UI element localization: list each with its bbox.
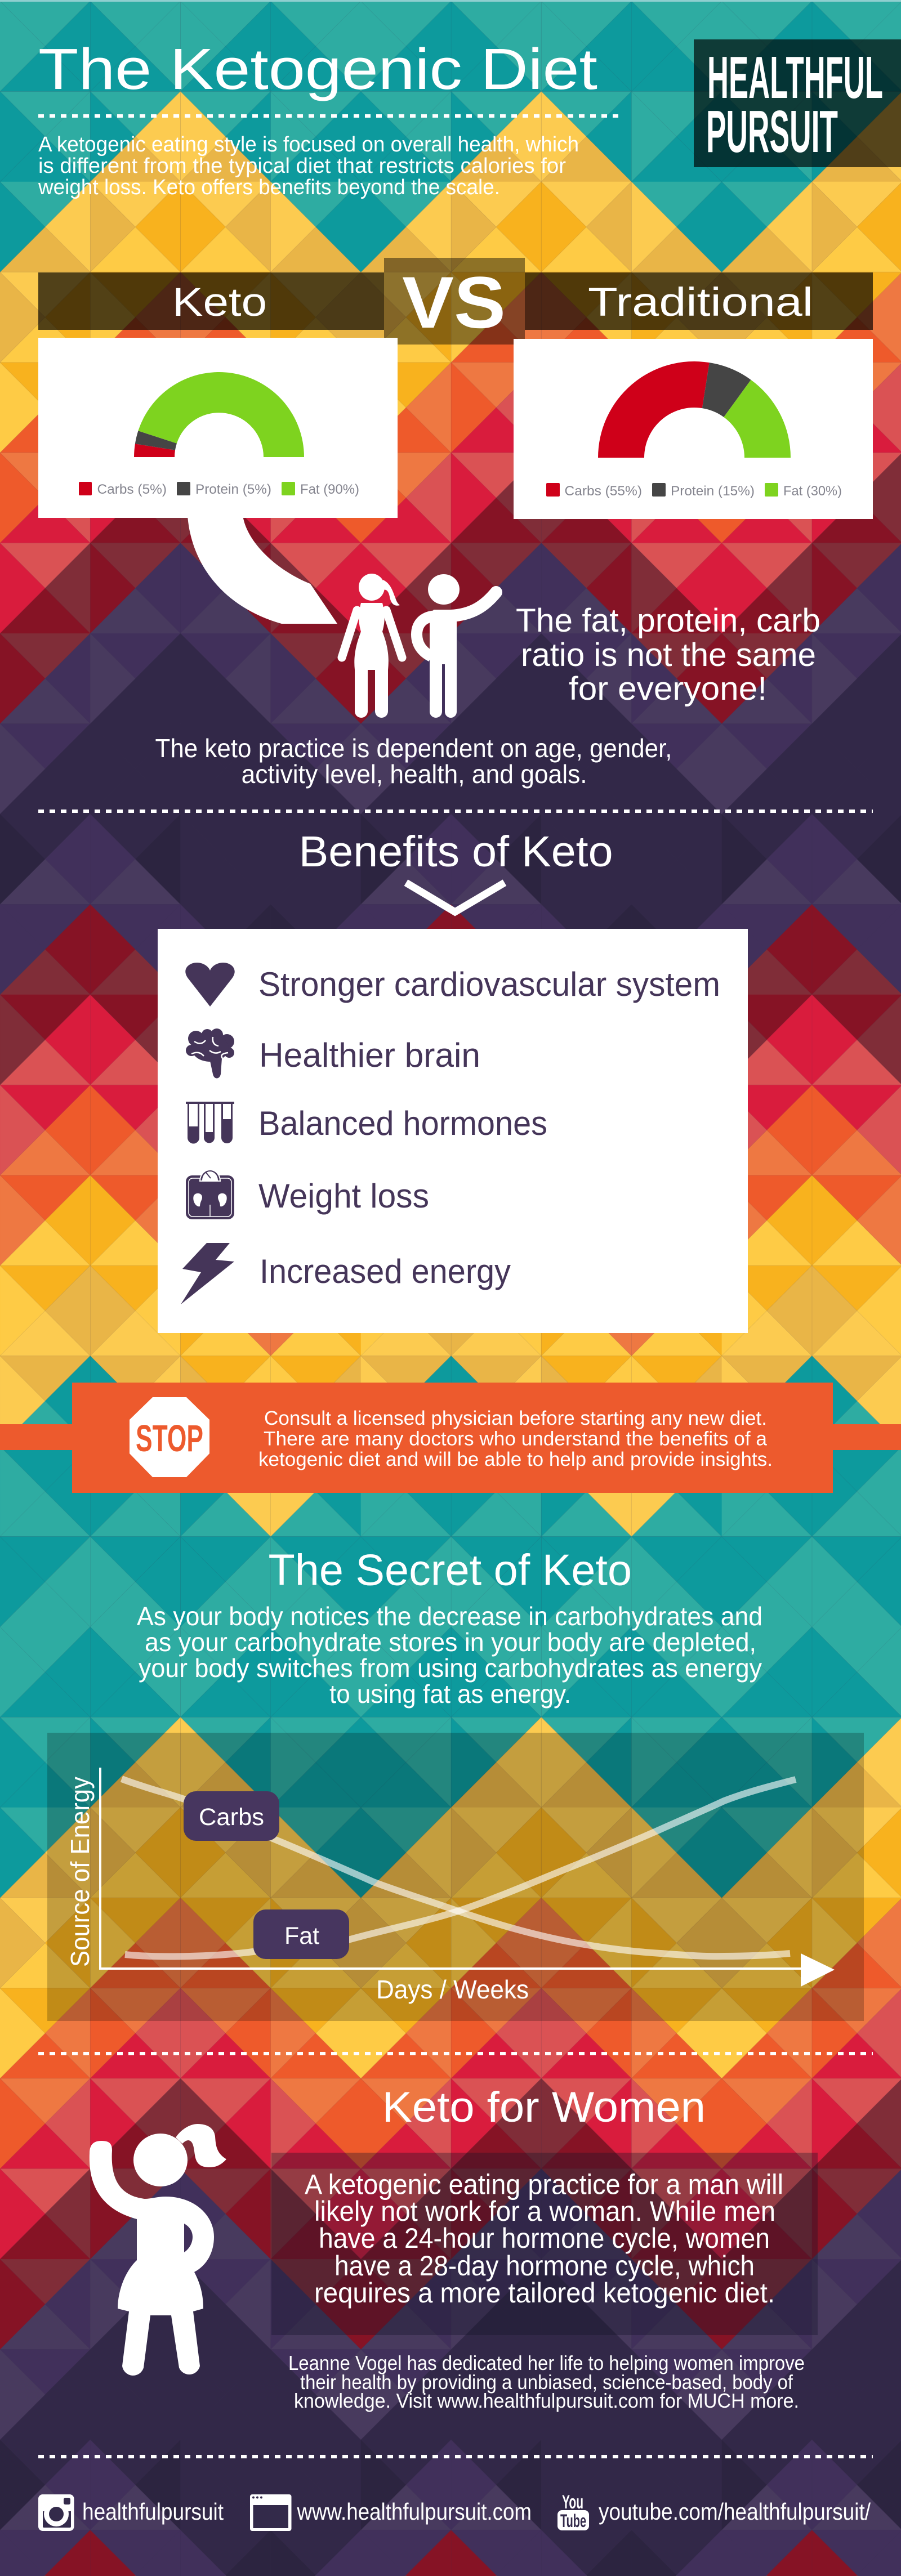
warning text xyxy=(258,1407,773,1470)
text block: about Leanne Vogel xyxy=(288,2351,805,2412)
benefit: energy: Increased energy xyxy=(260,1253,511,1290)
panel: traditional macro gauge chart: Protein (15%) xyxy=(671,484,755,499)
intro paragraph: is different from the typical diet that restricts calories for xyxy=(38,154,566,178)
icon: stop sign xyxy=(130,1397,209,1477)
panel: keto macro gauge chart: Fat (90%) xyxy=(300,482,359,497)
icon: instagram xyxy=(38,2494,74,2531)
benefit: hormones: Balanced hormones xyxy=(258,1104,547,1142)
warning text: ketogenic diet and will be able to help and provide insights. xyxy=(258,1448,773,1470)
icon: browser window xyxy=(250,2494,292,2531)
text block: secret of keto xyxy=(137,1602,762,1709)
heading: the secret of keto: The Secret of Keto xyxy=(268,1545,632,1594)
heading: keto for women: Keto for Women xyxy=(382,2083,706,2131)
axis label: x: Days / Weeks xyxy=(376,1975,529,2004)
panel: keto macro gauge chart: Protein (5%) xyxy=(195,482,271,497)
label: fat xyxy=(253,1909,349,1959)
benefit: weight loss: Weight loss xyxy=(258,1177,429,1215)
panel: keto for women text xyxy=(271,2153,818,2335)
icon: chevron xyxy=(406,883,505,912)
text block: about Leanne Vogel: knowledge. Visit www.healthfulpursuit.com for MUCH more. xyxy=(294,2389,799,2412)
icon: test tubes xyxy=(186,1102,234,1144)
icon: woman and man figures xyxy=(342,574,496,718)
heading: benefits of keto: Benefits of Keto xyxy=(299,828,613,876)
axis label: y: Source of Energy xyxy=(65,1777,95,1967)
chart: energy source crossover xyxy=(47,1733,864,2021)
warning text: Consult a licensed physician before starting any new diet. xyxy=(264,1407,767,1429)
logo: Healthful Pursuit xyxy=(694,39,901,167)
icon: brain xyxy=(186,1028,234,1079)
intro paragraph: A ketogenic eating style is focused on overall health, which xyxy=(38,133,579,156)
text block: secret of keto: your body switches from using carbohydrates as energy xyxy=(139,1653,762,1683)
panel: keto for women text: likely not work for a woman. While men xyxy=(314,2195,775,2227)
panel: keto for women text: A ketogenic eating practice for a man will xyxy=(305,2168,783,2200)
callout: ratio is not the same: for everyone! xyxy=(569,670,767,707)
text block: keto practice: The keto practice is dependent on age, gender, xyxy=(155,734,672,763)
label: carbs: Carbs xyxy=(199,1804,264,1831)
comparison header: Keto vs Traditional: Traditional xyxy=(588,280,813,325)
text block: about Leanne Vogel: their health by providing a unbiased, science-based, body of xyxy=(300,2371,793,2394)
footer: social links xyxy=(38,2492,871,2531)
intro paragraph: weight loss. Keto offers benefits beyond the scale. xyxy=(38,176,500,199)
panel: keto macro gauge chart: Carbs (5%) xyxy=(97,482,167,497)
panel: traditional macro gauge chart: Carbs (55%) xyxy=(564,484,642,499)
comparison header: Keto vs Traditional xyxy=(38,258,873,345)
panel: keto for women text: have a 24-hour hormone cycle, women xyxy=(319,2222,770,2254)
label: fat: Fat xyxy=(284,1922,319,1949)
text block: secret of keto: as your carbohydrate stores in your body are depleted, xyxy=(145,1627,756,1657)
warning text: There are many doctors who understand the benefits of a xyxy=(264,1428,768,1450)
panel: traditional macro gauge chart: Fat (30%) xyxy=(783,484,842,499)
icon: youtube: Tube xyxy=(560,2511,586,2531)
panel: keto macro gauge chart xyxy=(38,338,398,518)
panel: traditional macro gauge chart xyxy=(514,339,873,519)
text block: about Leanne Vogel: Leanne Vogel has dedicated her life to helping women improve xyxy=(288,2351,805,2374)
social text: website: www.healthfulpursuit.com xyxy=(297,2498,532,2525)
benefit: cardiovascular: Stronger cardiovascular system xyxy=(258,965,720,1003)
comparison header: Keto vs Traditional: Keto xyxy=(172,280,267,325)
callout: ratio is not the same: The fat, protein, carb xyxy=(516,602,820,639)
text block: keto practice xyxy=(155,734,672,789)
text block: keto practice: activity level, health, and goals. xyxy=(242,759,587,789)
social text: instagram: healthfulpursuit xyxy=(82,2498,224,2525)
benefit: brain: Healthier brain xyxy=(259,1036,480,1074)
icon: youtube xyxy=(557,2492,589,2531)
social text: youtube: youtube.com/healthfulpursuit/ xyxy=(599,2498,871,2525)
axes xyxy=(99,1768,835,1987)
label: carbs xyxy=(184,1791,279,1841)
panel: keto for women text: requires a more tailored ketogenic diet. xyxy=(314,2277,775,2309)
curve: fat xyxy=(125,1779,796,1957)
comparison header: Keto vs Traditional: VS xyxy=(402,261,506,343)
icon: stop sign: STOP xyxy=(136,1417,203,1460)
title: The Ketogenic Diet xyxy=(38,37,597,101)
icon: heart xyxy=(185,963,235,1007)
panel: benefits list xyxy=(158,929,748,1333)
curve: carbs xyxy=(122,1779,790,1956)
intro paragraph xyxy=(38,133,579,199)
callout: ratio is not the same: ratio is not the same xyxy=(521,637,816,673)
panel: keto for women text: have a 28-day hormone cycle, which xyxy=(334,2250,755,2282)
icon: youtube: You xyxy=(562,2492,583,2513)
icon: lightning bolt xyxy=(181,1243,234,1304)
icon: woman figure xyxy=(90,2124,226,2376)
arrow: from keto chart to people xyxy=(188,515,337,624)
text block: secret of keto: to using fat as energy. xyxy=(329,1679,571,1709)
text block: secret of keto: As your body notices the decrease in carbohydrates and xyxy=(137,1602,762,1631)
callout: ratio is not the same xyxy=(516,602,820,707)
icon: bathroom scale xyxy=(186,1170,234,1219)
callout: stop banner xyxy=(0,1383,901,1493)
